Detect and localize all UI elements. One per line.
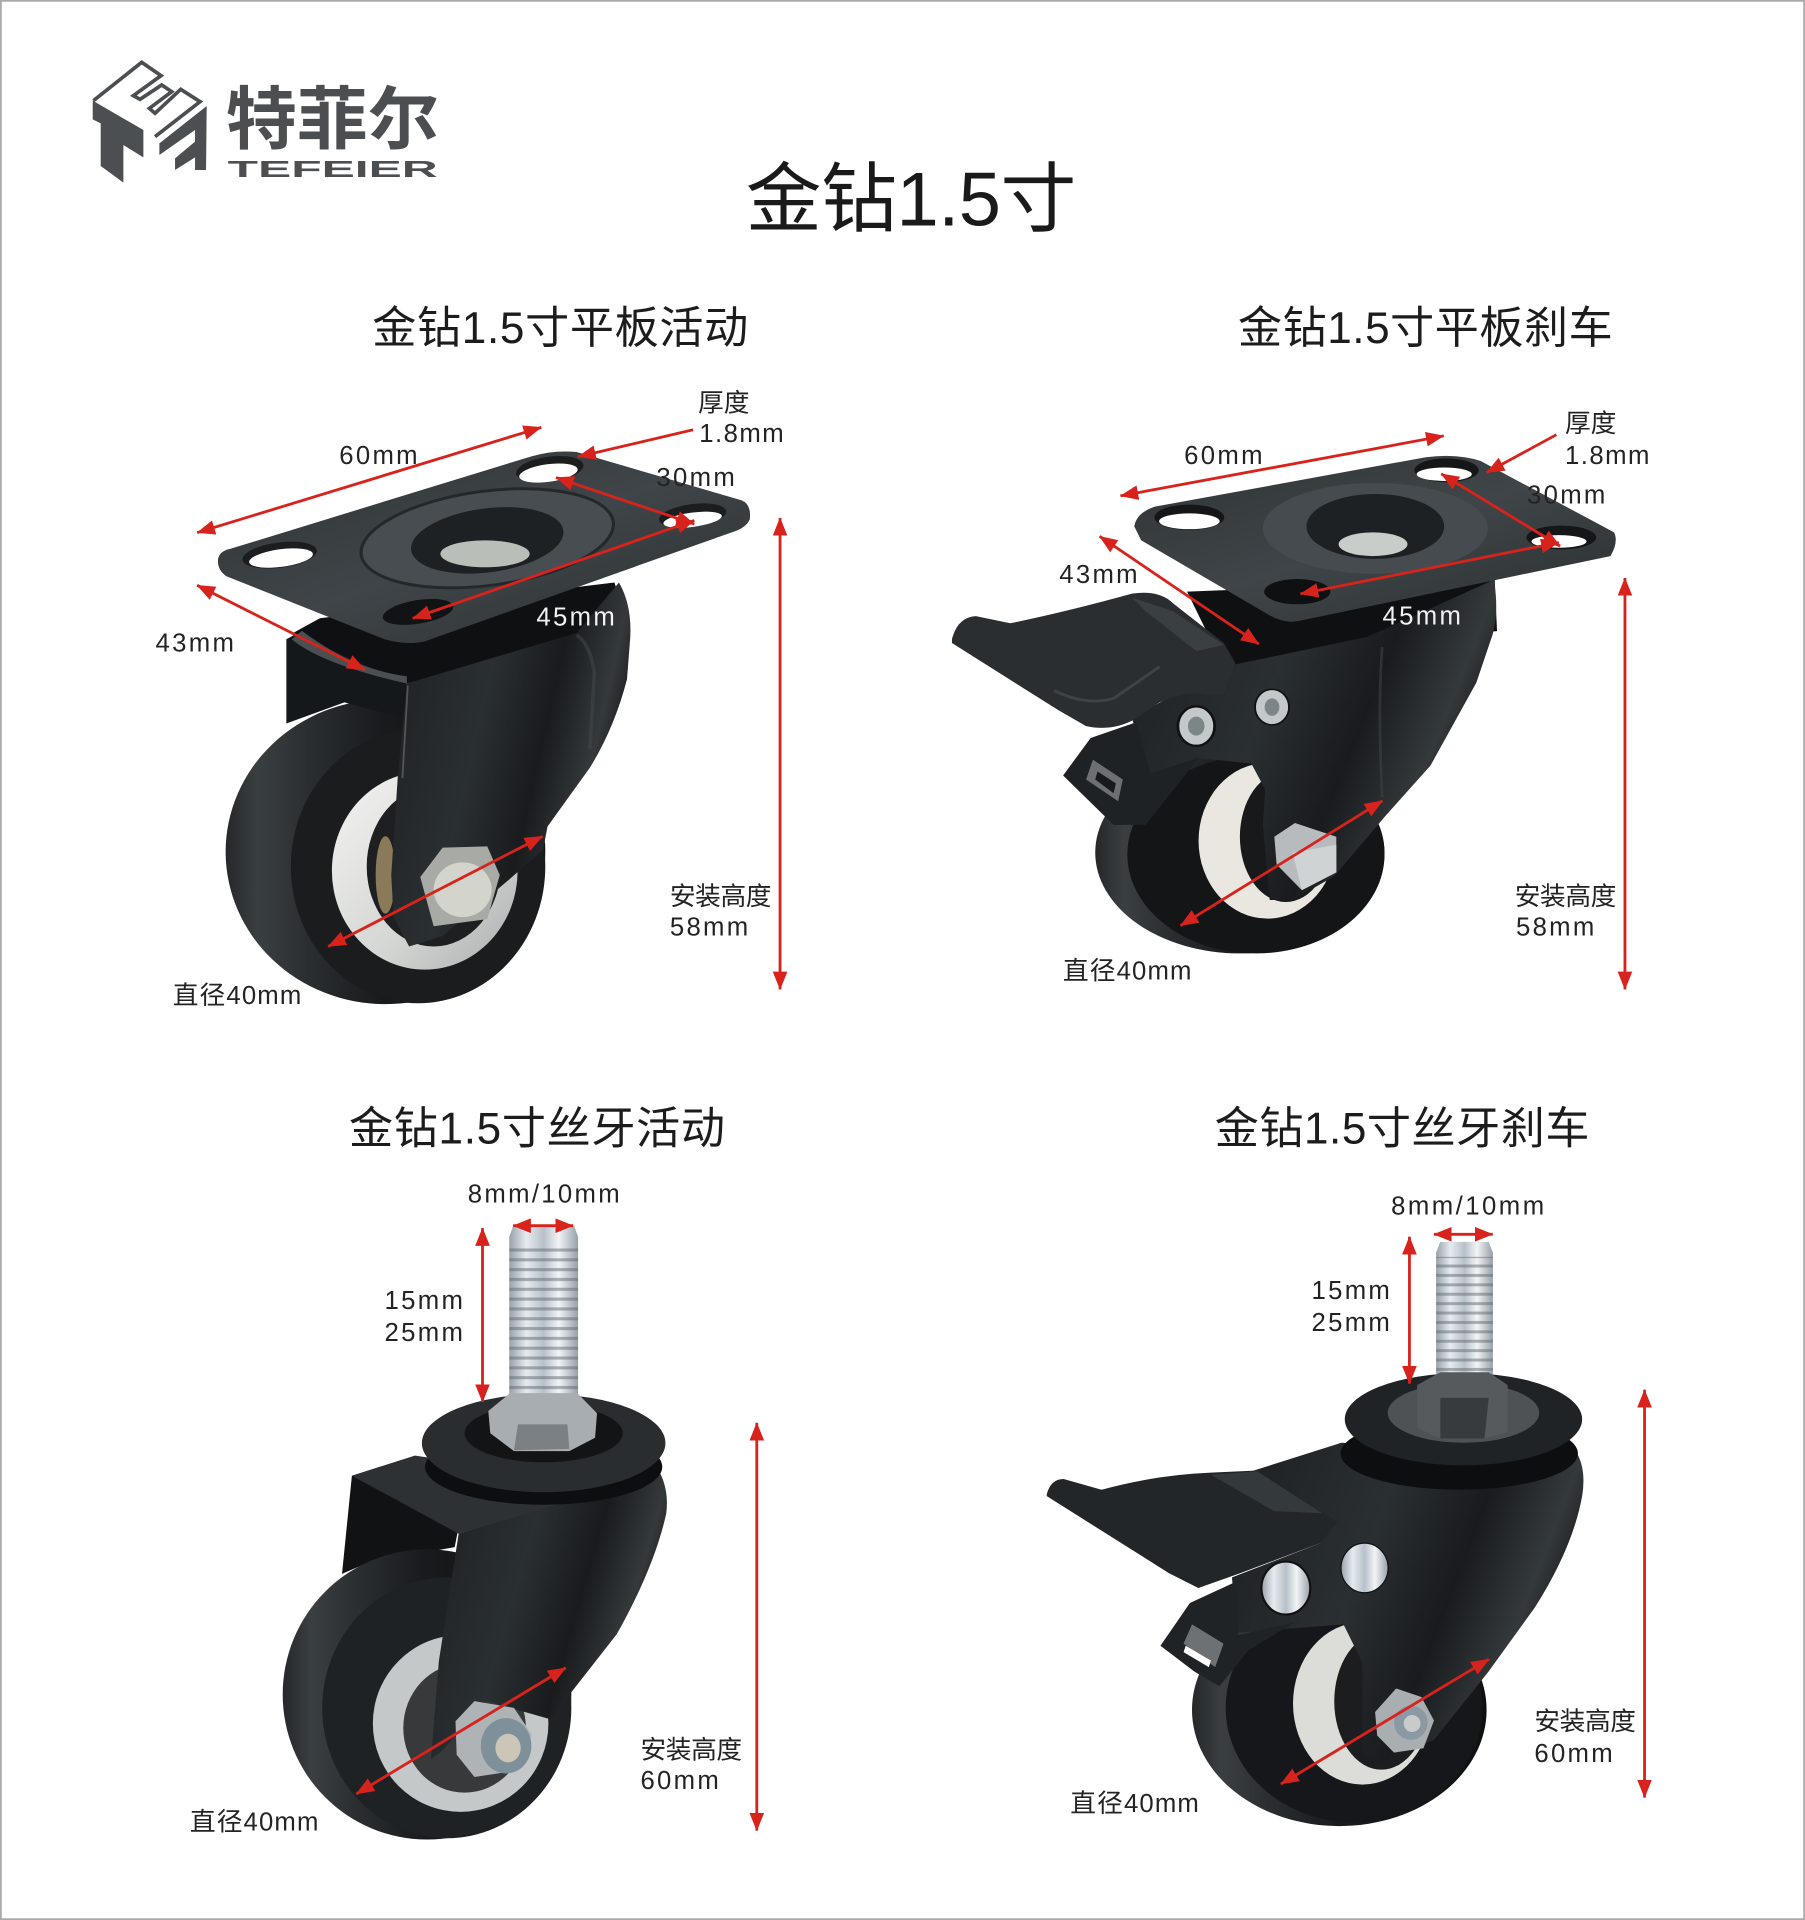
arrow: 60mm <box>197 427 541 533</box>
label: diameter: 直径40mm <box>1070 1789 1199 1818</box>
heading: 金钻1.5寸丝牙刹车 <box>1215 1105 1589 1154</box>
panel: threaded stem brake caster <box>1047 1105 1645 1826</box>
label: 30mm: 30mm <box>1527 481 1605 509</box>
label: diameter: 直径40mm <box>173 981 301 1010</box>
logo latin name: TEFEIER <box>228 156 438 182</box>
label: install height: 安装高度 <box>640 1735 742 1764</box>
caster photo: plate swivel <box>218 451 750 1004</box>
arrow: 30mm <box>1441 474 1560 546</box>
label: 15mm: 15mm <box>1311 1277 1390 1305</box>
label: install height: 安装高度 <box>1515 882 1616 911</box>
arrow: thickness <box>1487 435 1556 473</box>
label: diameter: 直径40mm <box>190 1808 318 1837</box>
label: 25mm: 25mm <box>385 1319 463 1347</box>
arrow: diameter <box>356 1668 566 1794</box>
label: 43mm: 43mm <box>1059 561 1138 589</box>
label: 58mm: 58mm <box>1516 914 1594 942</box>
label: 60mm: 60mm <box>640 1767 719 1795</box>
arrow: 60mm <box>1120 436 1444 496</box>
logo chinese name: 特菲尔 <box>226 81 439 158</box>
label: 60mm: 60mm <box>1534 1740 1613 1768</box>
arrow: 30mm <box>556 478 694 524</box>
main title: 金钻1.5寸 <box>746 157 1076 242</box>
label: 1.8mm: 1.8mm <box>699 420 784 448</box>
arrow: height <box>756 1423 758 1831</box>
heading: 金钻1.5寸丝牙活动 <box>349 1105 725 1154</box>
heading: 金钻1.5寸平板刹车 <box>1238 304 1613 353</box>
panel: threaded stem swivel caster <box>190 1105 757 1840</box>
label: 25mm: 25mm <box>1311 1309 1390 1337</box>
label: 60mm: 60mm <box>1184 442 1262 470</box>
arrow: stud length <box>481 1228 484 1402</box>
label: diameter: 直径40mm <box>1063 957 1191 986</box>
arrow: height <box>1643 1390 1646 1798</box>
arrow: height <box>779 518 781 989</box>
label: thickness: 厚度 <box>698 388 749 417</box>
panel: flat plate brake caster <box>952 304 1649 989</box>
arrow: diameter <box>1180 801 1382 926</box>
arrow: stud diameter <box>1434 1233 1493 1235</box>
label: stud size: 8mm/10mm <box>468 1180 620 1208</box>
logo: TEFEIER <box>93 62 439 183</box>
arrow: 45mm <box>413 520 694 618</box>
label: install height: 安装高度 <box>1534 1707 1636 1736</box>
label: 1.8mm: 1.8mm <box>1565 442 1649 470</box>
logo mark <box>93 62 207 183</box>
arrow: 43mm <box>1100 536 1259 644</box>
arrow: diameter <box>328 836 542 947</box>
caster photo: plate brake <box>952 456 1616 953</box>
panel: flat plate swivel caster <box>156 304 784 1010</box>
label: 45mm: 45mm <box>536 604 615 632</box>
arrow: 45mm <box>1300 542 1559 594</box>
label: install height: 安装高度 <box>670 882 771 911</box>
label: 58mm: 58mm <box>670 914 748 942</box>
label: thickness: 厚度 <box>1565 409 1616 438</box>
arrow: stud length <box>1408 1237 1411 1384</box>
arrow: diameter <box>1281 1659 1489 1784</box>
caster photo: threaded swivel <box>283 1226 667 1840</box>
label: 15mm: 15mm <box>385 1287 463 1315</box>
heading: 金钻1.5寸平板活动 <box>372 304 748 353</box>
caster photo: threaded brake <box>1047 1242 1583 1826</box>
label: 60mm: 60mm <box>339 442 418 470</box>
arrow: thickness <box>578 430 693 457</box>
arrow: stud diameter <box>513 1225 573 1227</box>
label: 43mm: 43mm <box>156 629 234 657</box>
label: stud size: 8mm/10mm <box>1391 1193 1544 1221</box>
label: 30mm: 30mm <box>656 464 735 492</box>
arrow: height <box>1624 578 1626 989</box>
arrow: 43mm <box>197 585 365 670</box>
label: 45mm: 45mm <box>1382 602 1461 630</box>
